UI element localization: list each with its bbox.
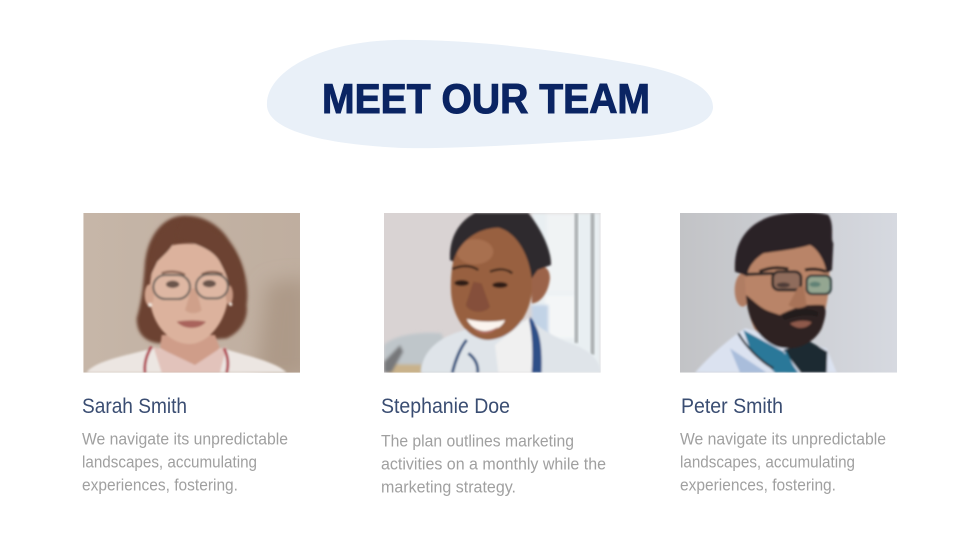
bio: Stephanie Doe: marketing strategy. bbox=[381, 478, 516, 496]
photo: Stephanie Doe bbox=[384, 213, 601, 374]
bio: Peter Smith: experiences, fostering. bbox=[680, 476, 836, 494]
title: MEET OUR TEAM bbox=[322, 75, 650, 122]
name: Peter Smith: Peter Smith bbox=[681, 395, 783, 418]
bio: Peter Smith: We navigate its unpredictable bbox=[680, 430, 886, 448]
bio: Sarah Smith: experiences, fostering. bbox=[82, 476, 238, 494]
bio: Peter Smith: landscapes, accumulating bbox=[680, 452, 855, 472]
name: Stephanie Doe: Stephanie Doe bbox=[381, 395, 510, 418]
title blob bbox=[267, 40, 713, 148]
team member: Stephanie Doe bbox=[381, 213, 611, 496]
bio: Stephanie Doe: The plan outlines marketing bbox=[381, 432, 574, 450]
team member: Sarah Smith bbox=[82, 213, 310, 494]
photo: Peter Smith bbox=[680, 212, 897, 373]
bio: Sarah Smith: We navigate its unpredictable bbox=[82, 430, 288, 448]
name: Sarah Smith: Sarah Smith bbox=[82, 395, 187, 418]
photo: Sarah Smith bbox=[83, 213, 310, 378]
bio: Stephanie Doe: activities on a monthly while the bbox=[381, 454, 606, 474]
team member: Peter Smith bbox=[680, 212, 897, 494]
bio: Sarah Smith: landscapes, accumulating bbox=[82, 452, 257, 472]
